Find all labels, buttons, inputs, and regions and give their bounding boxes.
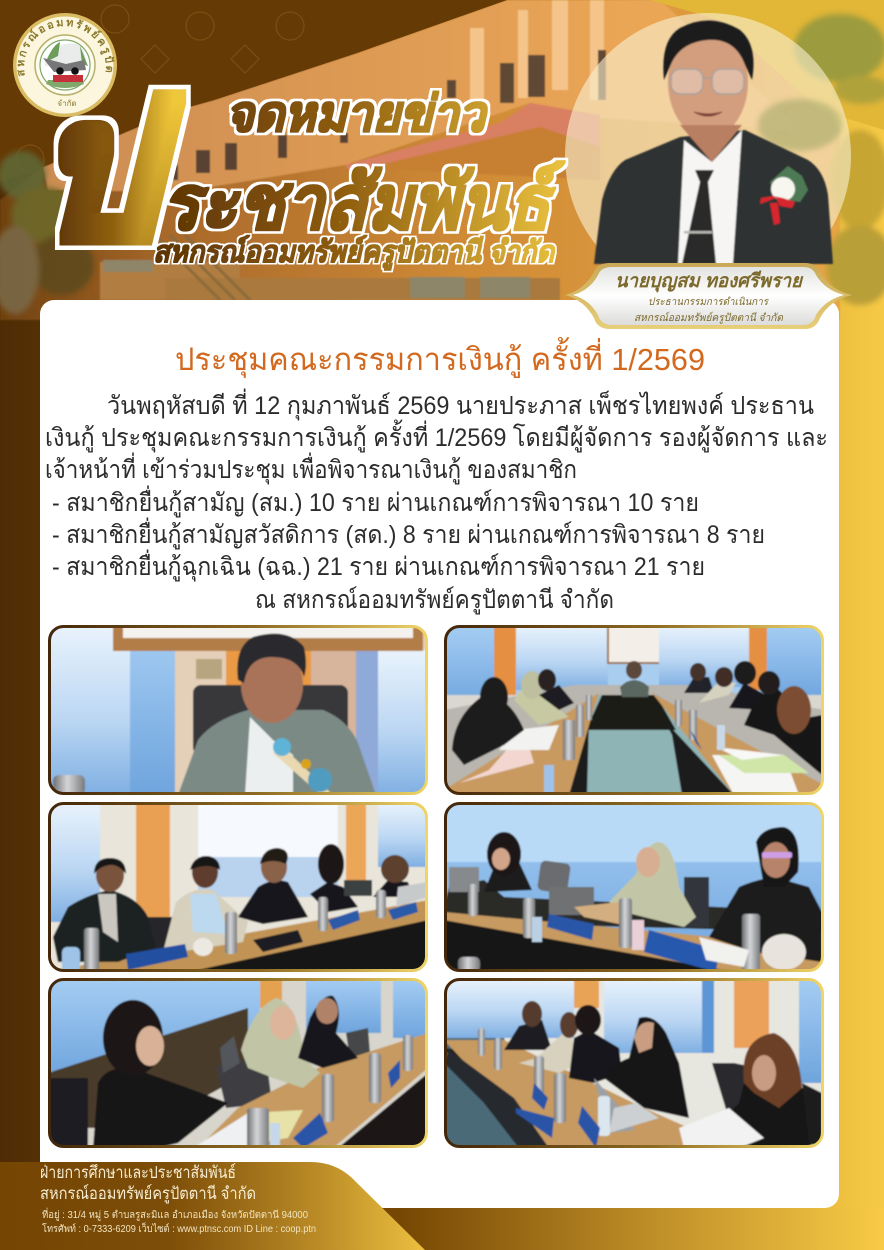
tree left	[0, 151, 94, 314]
portrait circle	[565, 13, 851, 299]
footer banner	[0, 1162, 425, 1250]
article body: วันพฤหัสบดี ที่ 12 กุมภาพันธ์ 2569 นายประภาส เพ็ชรไทยพงค์ ประธาน	[107, 388, 814, 421]
photo 4: committee members left side	[444, 802, 824, 972]
article body: - สมาชิกยื่นกู้สามัญสวัสดิการ (สด.) 8 ราย ผ่านเกณฑ์การพิจารณา 8 ราย	[52, 517, 765, 550]
tie	[682, 170, 716, 264]
glasses	[671, 69, 744, 94]
title: newsletter: จดหมายข่าว	[226, 86, 488, 142]
article body: - สมาชิกยื่นกู้สามัญ (สม.) 10 ราย ผ่านเกณฑ์การพิจารณา 10 ราย	[52, 485, 699, 518]
logo limited text: จำกัด	[57, 99, 77, 108]
footer department: ฝ่ายการศึกษาและประชาสัมพันธ์	[40, 1163, 236, 1182]
portrait: chairman	[594, 20, 833, 264]
footer contact: โทรศัพท์ : 0-7333-6209 เว็บไซต์ : www.ptnsc.com ID Line : coop.ptn	[42, 1221, 316, 1235]
bottom gold strip	[300, 1208, 884, 1250]
photo 1: chairman of the meeting	[48, 625, 428, 795]
article body	[45, 388, 828, 615]
footer address: ที่อยู่ : 31/4 หมู่ 5 ตำบลรูสะมิแล อำเภอเมือง จังหวัดปัตตานี 94000	[42, 1207, 308, 1221]
gold top-right sky	[650, 0, 884, 130]
brown top-left corner	[0, 0, 507, 182]
frame	[50, 626, 426, 794]
tree inside circle	[758, 99, 842, 151]
title: public relations: ระชาสัมพันธ์	[162, 161, 566, 246]
hair	[663, 20, 754, 80]
frame	[446, 804, 822, 970]
article body: เงินกู้ ประชุมคณะกรรมการเงินกู้ ครั้งที่ 1/2569 โดยมีผู้จัดการ รองผู้จัดการ และ	[45, 419, 828, 453]
tree right	[794, 14, 884, 305]
article body: - สมาชิกยื่นกู้ฉุกเฉิน (ฉฉ.) 21 ราย ผ่านเกณฑ์การพิจารณา 21 ราย	[52, 549, 705, 582]
decorative thai pattern	[16, 5, 304, 173]
frame	[446, 626, 822, 794]
tie clip	[684, 231, 712, 234]
awning	[345, 103, 600, 172]
flower corsage	[760, 166, 808, 225]
article body: เจ้าหน้าที่ เข้าร่วมประชุม เพื่อพิจารณาเงินกู้ ของสมาชิก	[45, 452, 577, 485]
photo 5: staff writing	[48, 978, 428, 1148]
position line 2: สหกรณ์ออมทรัพย์ครูปัตตานี จำกัด	[634, 311, 784, 324]
name plate	[565, 263, 852, 329]
frame	[50, 980, 426, 1146]
title: cooperative name: สหกรณ์ออมทรัพย์ครูปัตตานี จำกัด	[153, 235, 555, 271]
title: big letter: ป	[38, 65, 180, 277]
article body: ณ สหกรณ์ออมทรัพย์ครูปัตตานี จำกัด	[255, 586, 614, 615]
suit	[594, 130, 833, 264]
shirt	[678, 130, 742, 264]
article heading: ประชุมคณะกรรมการเงินกู้ ครั้งที่ 1/2569	[175, 337, 705, 379]
logo cannon	[43, 58, 86, 72]
logo	[13, 13, 117, 117]
smile	[694, 112, 722, 116]
footer cooperative: สหกรณ์ออมทรัพย์ครูปัตตานี จำกัด	[40, 1184, 256, 1204]
photo 6: staff with laptop	[444, 978, 824, 1148]
header photo: building	[0, 0, 840, 320]
position line 1: ประธานกรรมการดำเนินการ	[648, 296, 769, 308]
white content panel	[40, 300, 839, 1208]
face	[668, 26, 748, 138]
neck	[680, 125, 742, 162]
chairman name: นายบุญสม ทองศรีพราย	[615, 270, 804, 293]
photo 3: committee members right side	[48, 802, 428, 972]
frame	[50, 804, 426, 970]
frame	[446, 980, 822, 1146]
photo 2: meeting room overview	[444, 625, 824, 795]
